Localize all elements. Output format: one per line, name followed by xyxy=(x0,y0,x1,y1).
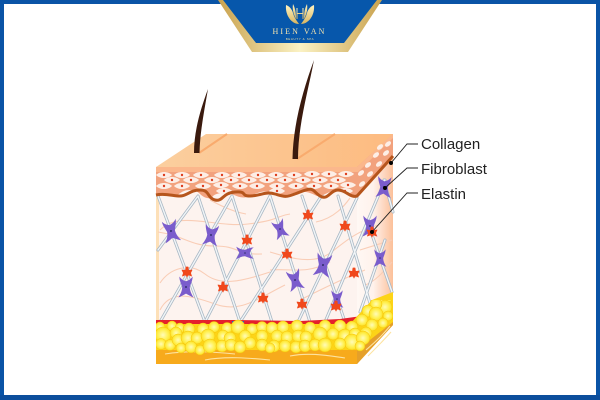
label: Collagen with leader line xyxy=(389,136,480,165)
label: Elastin with leader line: Elastin xyxy=(421,186,466,203)
fibroblast cells xyxy=(161,176,392,308)
thin pink fibres xyxy=(158,198,392,310)
label: Collagen with leader line: Collagen xyxy=(421,136,480,153)
logo badge xyxy=(218,0,382,52)
fat globules xyxy=(156,300,393,356)
brand name: HIEN VAN xyxy=(272,27,327,36)
label: Elastin with leader line xyxy=(370,186,466,234)
collagen fibre lattice xyxy=(158,180,393,322)
top surface of skin xyxy=(156,134,393,168)
label: Fibroblast with leader line: Fibroblast xyxy=(421,161,488,178)
epidermis layer xyxy=(156,134,393,200)
dermis background xyxy=(156,155,393,325)
subcutaneous fat base xyxy=(156,292,393,364)
skin cube xyxy=(155,60,393,364)
icon: lotus emblem xyxy=(286,4,314,24)
label: Fibroblast with leader line xyxy=(383,161,488,190)
elastin junctions xyxy=(182,210,377,311)
brand tagline: BEAUTY & SPA xyxy=(286,37,314,41)
hairs xyxy=(194,60,314,159)
